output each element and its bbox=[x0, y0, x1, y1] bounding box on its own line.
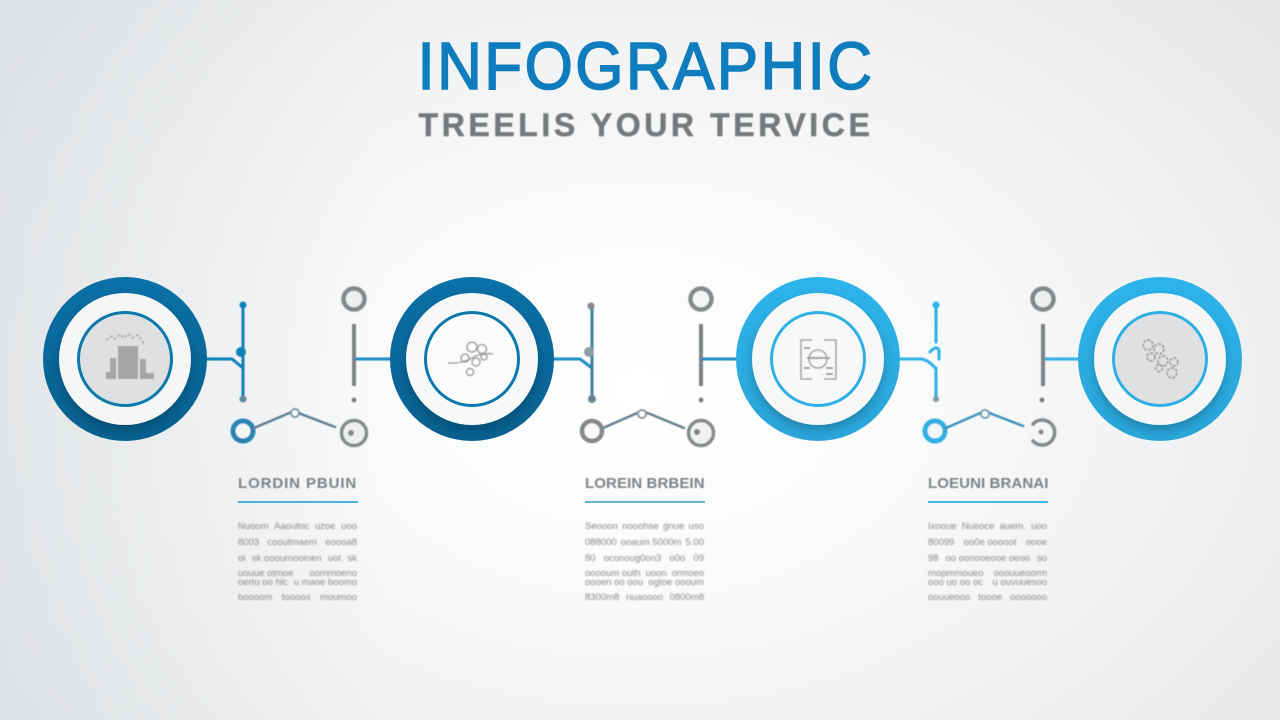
body line: Aaoutoc bbox=[274, 521, 309, 532]
body line: ormoeo bbox=[672, 568, 704, 579]
body line bbox=[238, 577, 358, 588]
icon: buildings bbox=[106, 334, 154, 379]
body line: Nueoce bbox=[962, 521, 994, 532]
text block 1 bbox=[238, 475, 358, 603]
body line: 80 bbox=[585, 553, 596, 564]
icon: cluster bbox=[1143, 340, 1178, 378]
circle node 1 bbox=[43, 277, 207, 441]
body line: 80099 bbox=[928, 537, 954, 548]
body line: 088000 bbox=[585, 537, 617, 548]
body line bbox=[238, 537, 358, 548]
body line: oooe bbox=[1026, 537, 1047, 548]
circle node 3 bbox=[736, 277, 900, 441]
body line bbox=[928, 577, 1048, 588]
title: INFOGRAPHIC bbox=[418, 30, 874, 104]
text block 2 bbox=[584, 475, 705, 603]
body line bbox=[584, 537, 704, 548]
body line: uoo bbox=[1031, 521, 1047, 532]
subtitle: TREELIS YOUR TERVICE bbox=[419, 107, 873, 143]
body line: 8300m8 bbox=[585, 592, 619, 603]
body line: uoo bbox=[341, 521, 357, 532]
circle node 2 bbox=[390, 277, 554, 441]
body line: sk bbox=[347, 553, 357, 564]
connector group 1 bbox=[205, 288, 392, 446]
body line: Seooon bbox=[585, 521, 618, 532]
body line: Nuoom bbox=[238, 521, 269, 532]
body line: Ixooue bbox=[928, 521, 957, 532]
body line bbox=[928, 568, 1048, 579]
body line bbox=[238, 521, 358, 532]
body line: auem. bbox=[1000, 521, 1026, 532]
heading 1: LORDIN PBUIN bbox=[238, 475, 357, 492]
body line: uoon bbox=[646, 568, 667, 579]
body line bbox=[238, 553, 358, 564]
body line: toooe bbox=[978, 592, 1002, 603]
body line: u maoe boomo bbox=[294, 577, 357, 588]
body line: 5.00 bbox=[686, 537, 704, 548]
body line: sk oooumooinen bbox=[252, 553, 322, 564]
body line: ooooooo bbox=[1010, 592, 1047, 603]
body line: oommoeno bbox=[309, 568, 357, 579]
body line: 8003 bbox=[238, 537, 259, 548]
icon: framed device bbox=[801, 340, 836, 379]
body line: o0o bbox=[669, 553, 685, 564]
body line: 0800m8 bbox=[670, 592, 704, 603]
body line bbox=[928, 592, 1048, 603]
body line: oi bbox=[238, 553, 245, 564]
body line: oooen oo oou bbox=[585, 577, 643, 588]
body line: ooo uo oo oc bbox=[928, 577, 983, 588]
body line: u ouvuuesoo bbox=[993, 577, 1047, 588]
body line: oo0e ooooot bbox=[964, 537, 1017, 548]
body line bbox=[584, 577, 704, 588]
body line: uouue otmoe bbox=[238, 568, 293, 579]
body line: oconoug0on3 bbox=[604, 553, 661, 564]
body line: nooohse bbox=[622, 521, 659, 532]
body line: cooutmaem bbox=[267, 537, 317, 548]
body line: oertu oo hlc bbox=[238, 577, 288, 588]
body line: nuaoooo bbox=[626, 592, 663, 603]
body line bbox=[238, 568, 358, 579]
body line bbox=[928, 537, 1048, 548]
rule 3 bbox=[928, 501, 1048, 503]
connector group 3 bbox=[898, 288, 1082, 445]
heading 2: LOREIN BRBEIN bbox=[585, 475, 705, 492]
body line: toooos bbox=[282, 592, 310, 603]
body line: uot bbox=[328, 553, 341, 564]
body line: gnue bbox=[663, 521, 684, 532]
icon: leaf sprig bbox=[448, 342, 493, 376]
body line: mopmmoueo bbox=[928, 568, 983, 579]
body line: ooooum outh bbox=[585, 568, 640, 579]
rule 2 bbox=[585, 501, 705, 503]
body line: uzoe bbox=[315, 521, 335, 532]
body line: ooouueoorm bbox=[994, 568, 1047, 579]
body line bbox=[585, 521, 704, 532]
body line: boooom bbox=[238, 592, 272, 603]
body line bbox=[584, 568, 704, 579]
body line: eoooa8 bbox=[325, 537, 357, 548]
heading 3: LOEUNI BRANAI bbox=[928, 475, 1048, 492]
body line: moumoo bbox=[320, 592, 357, 603]
body line: oo oonooeooe oeoo bbox=[946, 553, 1030, 564]
body line: oouueooo bbox=[928, 592, 970, 603]
body line: so bbox=[1037, 553, 1047, 564]
body line: 98 bbox=[928, 553, 939, 564]
body line: ooaum 5000m bbox=[621, 537, 681, 548]
body line bbox=[238, 592, 358, 603]
body line: uso bbox=[689, 521, 704, 532]
body line bbox=[584, 592, 704, 603]
circle node 4 bbox=[1078, 277, 1242, 441]
text block 3 bbox=[928, 475, 1048, 603]
body line bbox=[584, 553, 704, 564]
connector group 2 bbox=[552, 288, 738, 446]
body line: 09 bbox=[693, 553, 704, 564]
body line: ogtoe oooum bbox=[649, 577, 704, 588]
rule 1 bbox=[238, 501, 358, 503]
body line bbox=[928, 521, 1048, 532]
